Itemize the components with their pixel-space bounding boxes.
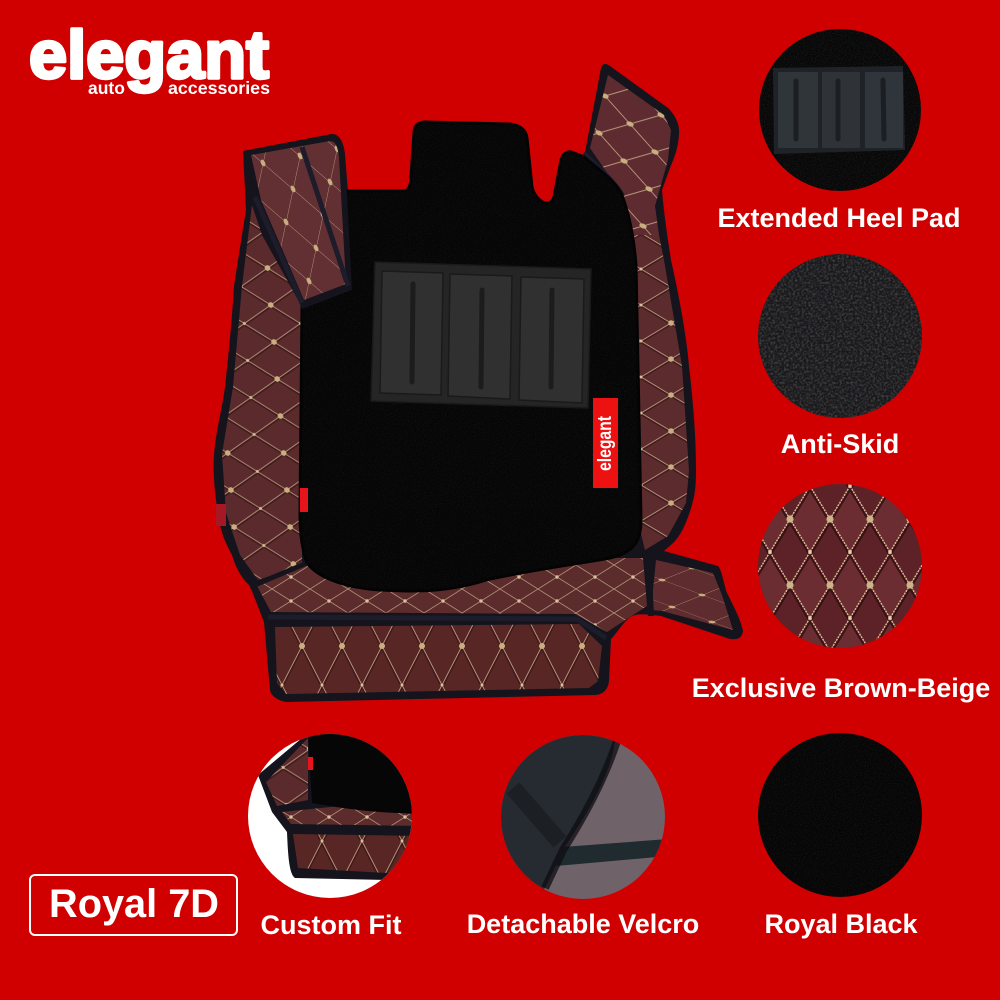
floor mat product photo	[214, 64, 743, 702]
logo: elegant auto accessories: accessories	[168, 78, 270, 98]
icon: textured carpet close-up	[755, 250, 925, 422]
feature: Detachable Velcro	[467, 730, 699, 939]
label: Anti-Skid	[781, 429, 899, 459]
icon: quilted leather close-up	[758, 484, 922, 648]
mat: left side panel	[222, 205, 302, 580]
mat: right side panel	[584, 75, 689, 550]
mat: dark outer binding	[214, 64, 743, 702]
mat: red elegant label: elegant	[595, 415, 616, 471]
mat: right foot flap	[648, 553, 733, 630]
feature: Custom Fit	[248, 734, 412, 934]
mat: small red tabs	[216, 488, 308, 526]
label: Custom Fit	[260, 910, 402, 940]
mat: bottom front panel	[268, 617, 606, 694]
feature: Royal Black	[755, 730, 925, 939]
label: Exclusive Brown-Beige	[692, 673, 990, 703]
icon: heel pad close-up	[755, 25, 925, 195]
label: Royal Black	[764, 909, 919, 939]
mat: left upper flap	[243, 134, 352, 309]
feature: Exclusive Brown-Beige	[692, 484, 990, 703]
badge: Royal 7D	[30, 875, 237, 935]
icon: mat corner close-up	[245, 730, 420, 900]
badge: Royal 7D: Royal 7D	[49, 882, 219, 926]
mat: red elegant label	[593, 398, 618, 488]
icon: velcro close-up	[495, 730, 668, 902]
feature: Anti-Skid	[755, 250, 925, 459]
logo: elegant auto accessories: auto	[88, 78, 125, 98]
icon: black carpet close-up	[755, 730, 925, 900]
mat: lower middle panel	[250, 558, 647, 632]
feature: Extended Heel Pad	[717, 25, 961, 233]
mat: rubber heel pad	[371, 262, 591, 408]
mat: black carpet	[296, 118, 646, 596]
label: Extended Heel Pad	[717, 203, 961, 233]
label: Detachable Velcro	[467, 909, 699, 939]
logo: elegant auto accessories: elegant	[29, 17, 269, 93]
